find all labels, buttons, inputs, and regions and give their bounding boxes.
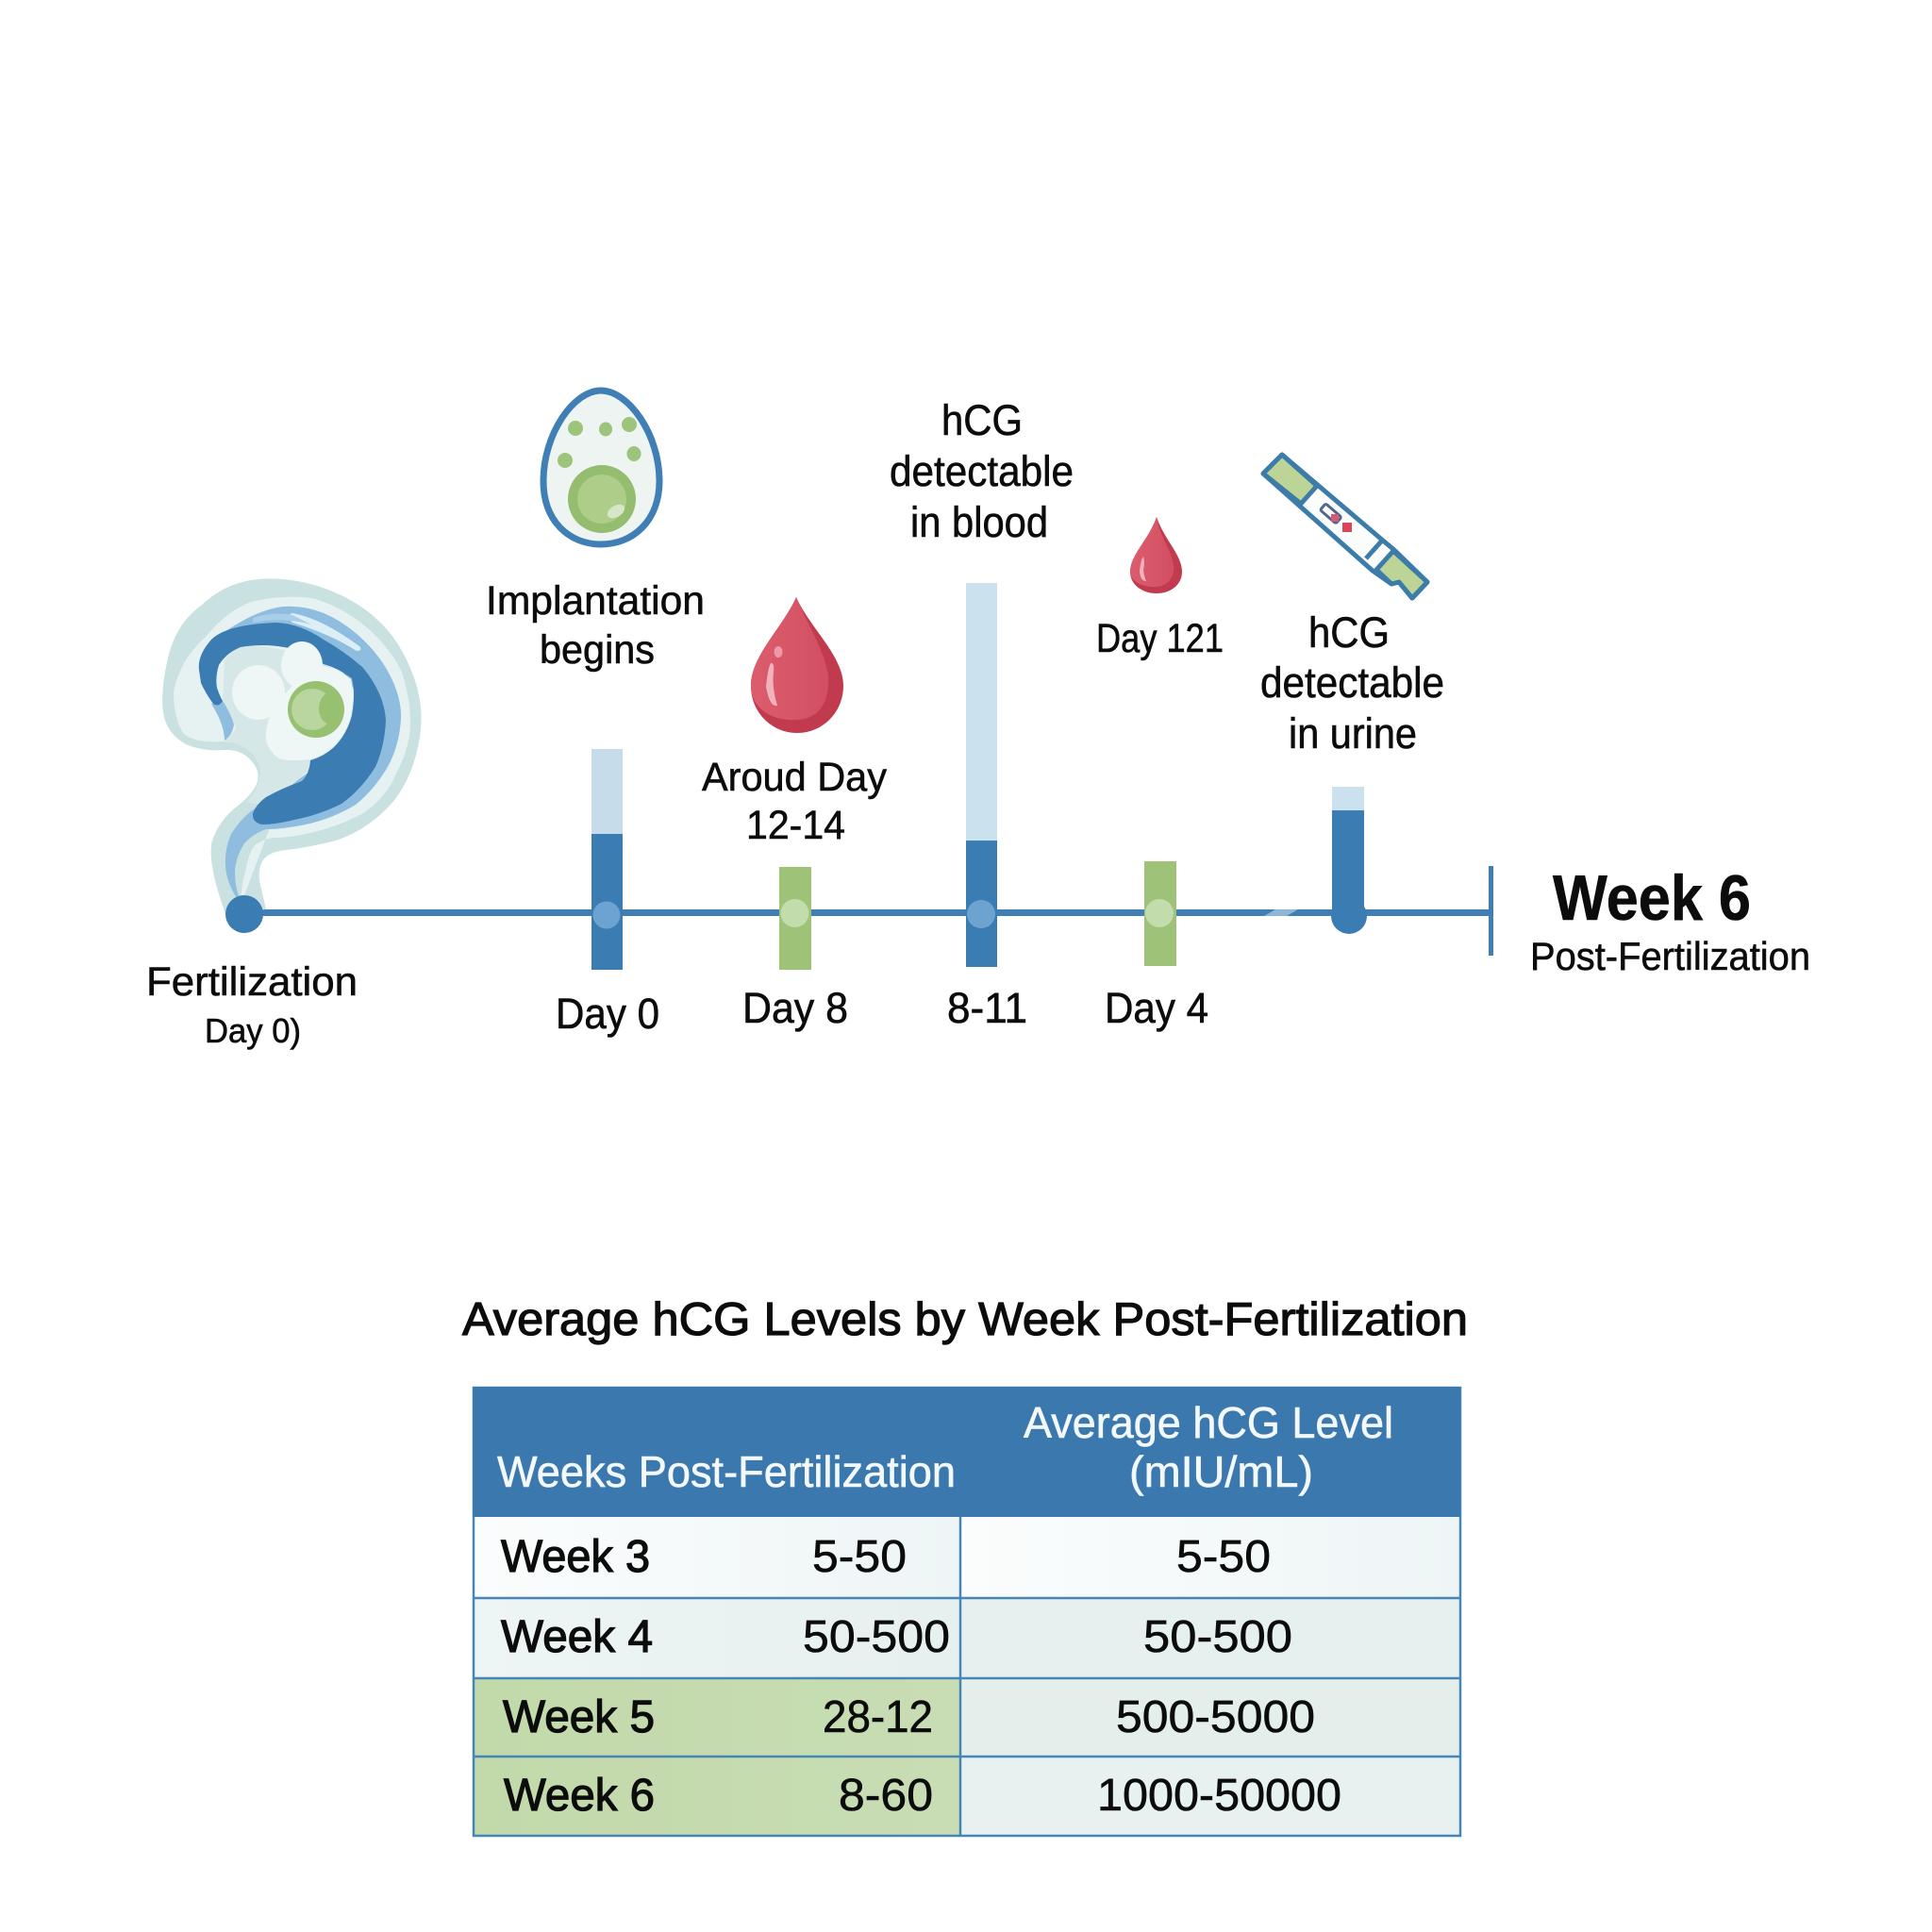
label: day 8: Day 8 xyxy=(742,984,848,1032)
icon: large blood drop xyxy=(751,597,843,733)
label: around day 12-14: Aroud Day xyxy=(702,755,887,800)
label: week 6: Week 6 xyxy=(1553,862,1751,934)
label: fertilization: Fertilization xyxy=(146,959,358,1005)
row: week 4: 50-500 xyxy=(803,1612,950,1662)
bar: urine detection with bulb xyxy=(1331,787,1367,934)
label: hcg detectable in urine: in urine xyxy=(1289,709,1417,758)
label: hcg detectable in blood: in blood xyxy=(910,498,1048,546)
fertilization dot xyxy=(225,895,263,933)
label: hcg detectable in blood: detectable xyxy=(890,447,1074,495)
icon: pregnancy test strip xyxy=(1263,455,1427,598)
label: hcg detectable in urine: detectable xyxy=(1260,658,1444,707)
row: week 3: Week 3 xyxy=(501,1532,650,1582)
table header: Weeks Post-Fertilization xyxy=(497,1447,956,1496)
label: implantation begins: Implantation xyxy=(486,578,705,624)
row: week 6: 1000-50000 xyxy=(1097,1771,1341,1821)
label: day 121: Day 121 xyxy=(1096,616,1224,661)
table rows background xyxy=(473,1517,1460,1836)
row: week 4 xyxy=(501,1612,1292,1662)
bar: day 4 xyxy=(1144,861,1298,966)
label: post-fertilization: Post-Fertilization xyxy=(1530,934,1810,978)
label: day 0): Day 0) xyxy=(205,1011,301,1050)
icon: small blood drop xyxy=(1130,517,1182,593)
table header: Average hCG Level xyxy=(1024,1398,1393,1447)
label: day 0: Day 0 xyxy=(556,990,659,1038)
label: fertilization xyxy=(146,959,358,1050)
row: week 3: 5-50 xyxy=(812,1532,907,1582)
label: week 6 xyxy=(1530,862,1810,978)
row: week 6: 8-60 xyxy=(839,1771,933,1821)
icon: fertilization swirl xyxy=(162,578,422,933)
label: implantation begins: begins xyxy=(540,627,655,673)
bar: 8-11 xyxy=(966,583,997,967)
row: week 5: 500-5000 xyxy=(1116,1692,1315,1742)
table header: (mIU/mL) xyxy=(1129,1447,1313,1496)
table title: Average hCG Levels by Week Post-Fertilization xyxy=(462,1294,1468,1345)
timeline end tick xyxy=(1489,866,1493,956)
label: around day 12-14 xyxy=(702,755,887,848)
label: hcg detectable in urine xyxy=(1260,608,1444,758)
label: day 4: Day 4 xyxy=(1105,984,1208,1032)
label: hcg detectable in blood: hCG xyxy=(941,396,1023,444)
label: implantation begins xyxy=(486,578,705,673)
table header xyxy=(473,1387,1460,1517)
label: hcg detectable in blood xyxy=(890,396,1074,546)
row: week 5 xyxy=(503,1692,1315,1742)
label: around day 12-14: 12-14 xyxy=(746,803,845,848)
row: week 3 xyxy=(501,1532,1271,1582)
row: week 6 xyxy=(504,1771,1341,1821)
label: 8-11: 8-11 xyxy=(947,984,1027,1032)
bar: day 0 xyxy=(591,749,623,970)
bar: day 8 xyxy=(779,867,811,970)
row: week 4: 50-500 xyxy=(1143,1612,1292,1662)
row: week 5: 28-12 xyxy=(823,1692,933,1742)
label: hcg detectable in urine: hCG xyxy=(1308,608,1390,657)
table: hCG levels by week xyxy=(473,1387,1460,1836)
timeline axis xyxy=(245,866,1493,956)
row: week 4: Week 4 xyxy=(501,1612,653,1662)
icon: embryo egg xyxy=(543,391,659,544)
row: week 3: 5-50 xyxy=(1176,1532,1271,1582)
table grid xyxy=(474,1388,1460,1836)
row: week 6: Week 6 xyxy=(504,1771,655,1821)
row: week 5: Week 5 xyxy=(503,1692,655,1742)
